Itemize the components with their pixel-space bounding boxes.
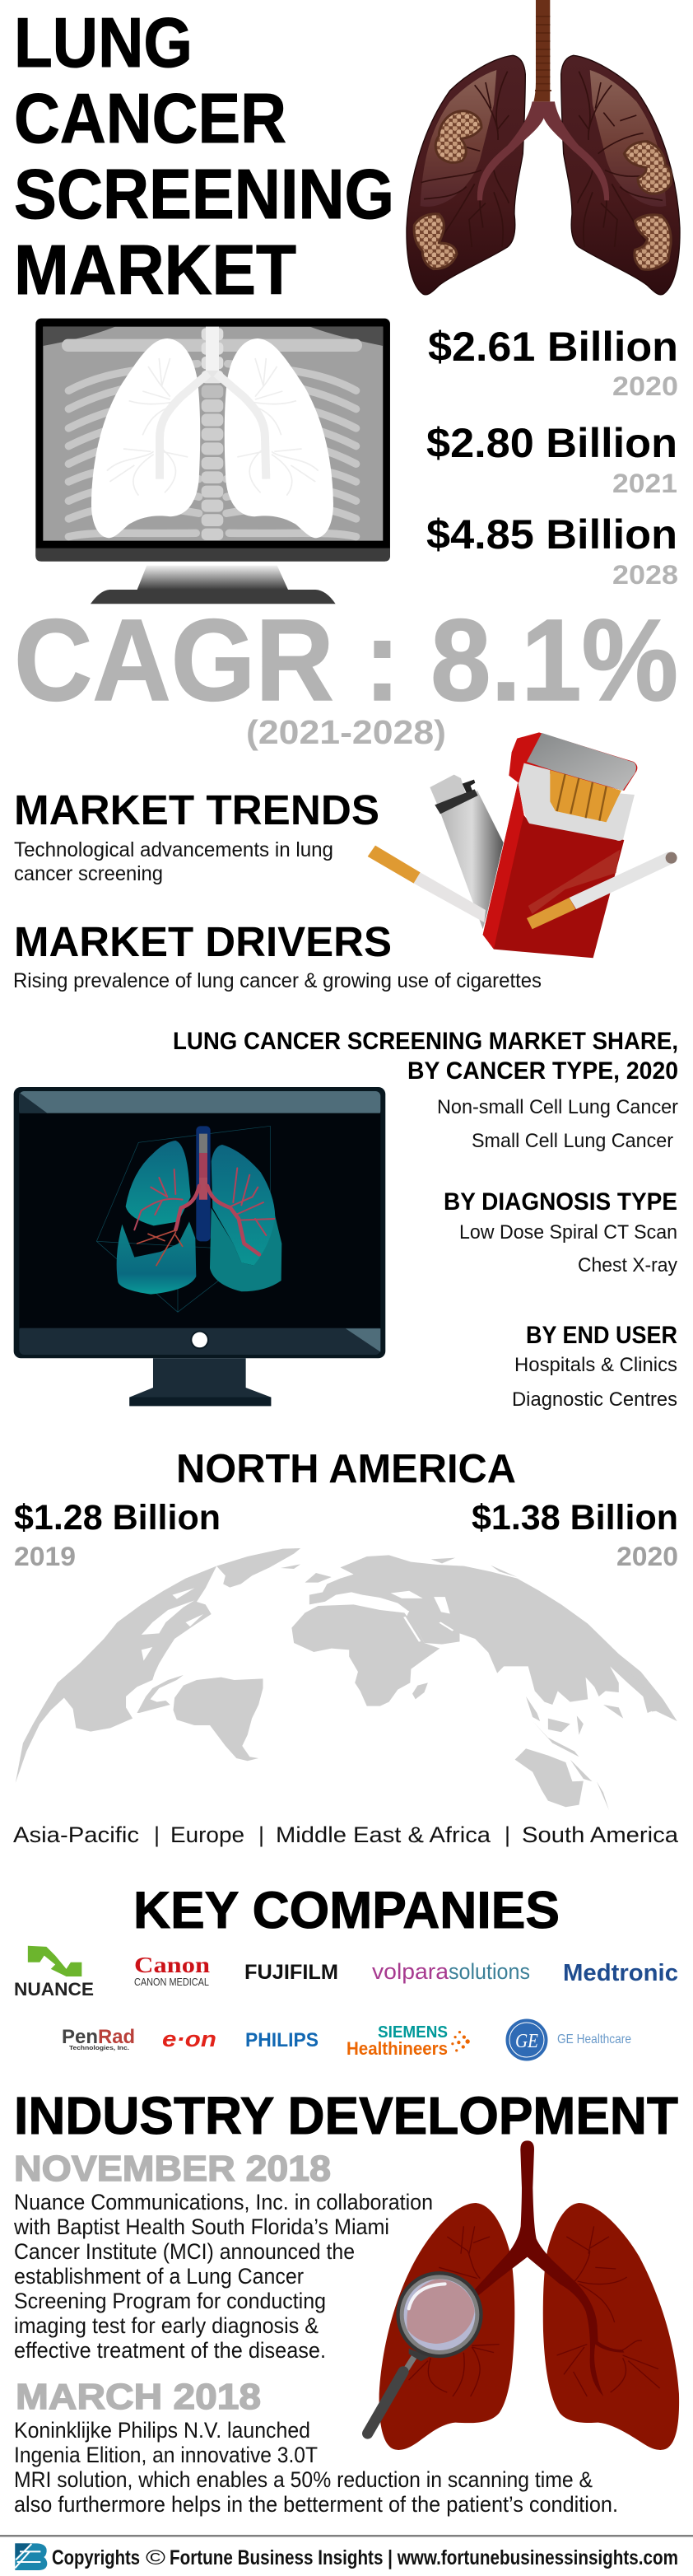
CAGR callout: (2021-2028) [246,713,446,751]
heading: key companies: KEY COMPANIES [133,1882,560,1939]
logo: Volpara Solutions [372,1959,530,1984]
list: diagnosis type: Chest X-ray [578,1254,677,1276]
illustration: monitor with teal lungs [14,1087,385,1406]
stat: north america 2020: 2020 [616,1542,678,1571]
list: diagnosis type: Low Dose Spiral CT Scan [459,1221,677,1244]
title: LUNG [14,4,193,82]
stat: market size 2020 [428,324,678,401]
list: end user: Diagnostic Centres [512,1388,677,1411]
title: SCREENING [14,156,394,234]
heading: market share by cancer type [173,1028,678,1085]
stat: market size 2021: 2021 [612,469,677,498]
logo: Philips: PHILIPS [245,2029,319,2051]
stat: market size 2020: $2.61 Billion [428,324,678,370]
development: November 2018: establishment of a Lung Cancer [14,2264,304,2289]
stat: market size 2020: 2020 [612,371,678,401]
development: March 2018: Ingenia Elition, an innovative 3.0T [14,2443,318,2467]
section: market trends: cancer screening [14,862,163,885]
list: end user: Hospitals & Clinics [514,1354,677,1376]
development: March 2018 [14,2377,618,2517]
logo: GE Healthcare: GE [515,2031,538,2052]
development: March 2018: also furthermore helps in the betterment of the patient’s condition. [14,2492,618,2517]
logo: Siemens Healthineers: Healthineers [346,2038,448,2059]
regions list: Europe [170,1822,244,1847]
stat: north america 2019 [14,1498,221,1571]
list: cancer types [437,1096,678,1152]
footer [15,2543,678,2570]
list: end user: BY END USER [526,1322,677,1349]
stat: market size 2028: $4.85 Billion [426,511,677,558]
list: end user [512,1322,677,1411]
development: March 2018: MRI solution, which enables a 50% reduction in scanning time & [14,2467,593,2492]
illustration: cigarettes and lighter [368,732,677,958]
logo: Nuance [14,1946,94,2000]
logo: PenRad: Rad [98,2026,135,2048]
footer: Copyrights [52,2546,140,2569]
heading: industry development: INDUSTRY DEVELOPMENT [14,2086,678,2145]
development: November 2018: with Baptist Health South Florida’s Miami [13,2214,389,2239]
section: market drivers [13,918,542,992]
section: market trends [14,786,379,885]
regions list: | [154,1822,160,1847]
logo: PenRad [62,2026,135,2051]
illustration: x-ray monitor [35,319,390,604]
development: November 2018: effective treatment of the disease. [14,2338,326,2363]
development: March 2018: Koninklijke Philips N.V. launched [14,2418,310,2443]
development: November 2018 [13,2149,433,2363]
logo: Nuance: NUANCE [14,1979,94,2000]
illustration: lungs with magnifier [368,2140,679,2450]
world map [16,1548,677,1810]
logo: Medtronic: Medtronic [563,1960,678,1986]
stat: market size 2021: $2.80 Billion [426,420,677,466]
list: diagnosis type [444,1188,677,1276]
stat: market size 2028: 2028 [612,560,678,590]
list: cancer types: Small Cell Lung Cancer [472,1130,673,1152]
logo: Siemens Healthineers: SIEMENS [378,2023,448,2042]
stat: north america 2019: $1.28 Billion [14,1498,221,1538]
logo: Canon Medical [134,1953,210,1988]
logo: Volpara Solutions: volpara [372,1959,449,1984]
regions list: | [505,1822,510,1847]
regions list: South America [522,1822,679,1847]
regions list: Middle East & Africa [276,1822,491,1847]
logo: Siemens Healthineers [346,2023,470,2059]
development: November 2018: Nuance Communications, Inc. in collaboration [14,2190,433,2214]
stat: north america 2019: 2019 [14,1542,76,1571]
logo: Canon Medical: Canon [134,1953,210,1977]
stat: north america 2020 [472,1498,678,1571]
regions list [13,1822,679,1847]
development: November 2018: NOVEMBER 2018 [14,2149,331,2189]
logo: Canon Medical: CANON MEDICAL [134,1976,209,1988]
regions list: Asia-Pacific [13,1822,139,1847]
stat: market size 2021 [426,420,677,498]
logo: GE Healthcare: GE Healthcare [557,2032,631,2046]
list: diagnosis type: BY DIAGNOSIS TYPE [444,1188,677,1216]
stat: market size 2028 [426,511,678,590]
development: November 2018: imaging test for early diagnosis & [14,2313,319,2338]
development: November 2018: Cancer Institute (MCI) announced the [14,2239,355,2264]
section: market drivers: MARKET DRIVERS [14,918,392,965]
section: market drivers: Rising prevalence of lung cancer & growing use of cigarettes [13,969,542,992]
logo: GE Healthcare [506,2019,631,2060]
heading: north america: NORTH AMERICA [176,1447,516,1491]
icon: Fortune Business Insights logo [15,2543,47,2570]
illustration: diseased lungs with tumours [407,0,680,295]
logo: PenRad: Technologies, Inc. [69,2046,129,2051]
development: March 2018: MARCH 2018 [16,2377,261,2417]
title: CANCER [14,80,286,158]
title: MARKET [14,231,296,310]
heading: market share by cancer type: BY CANCER TYPE, 2020 [407,1057,678,1085]
development: November 2018: Screening Program for conducting [14,2289,326,2313]
stat: north america 2020: $1.38 Billion [472,1498,678,1538]
list: cancer types: Non-small Cell Lung Cancer [437,1096,678,1118]
section: market trends: Technological advancements in lung [14,838,333,861]
footer: © [146,2546,166,2569]
regions list: | [258,1822,264,1847]
logo: E.ON: e·on [162,2027,216,2051]
logo: Fujifilm: FUJIFILM [244,1961,338,1984]
logo: PenRad: Pen [62,2026,98,2048]
title [14,4,394,310]
section: market trends: MARKET TRENDS [14,786,379,833]
logo: Volpara Solutions: solutions [449,1959,530,1984]
